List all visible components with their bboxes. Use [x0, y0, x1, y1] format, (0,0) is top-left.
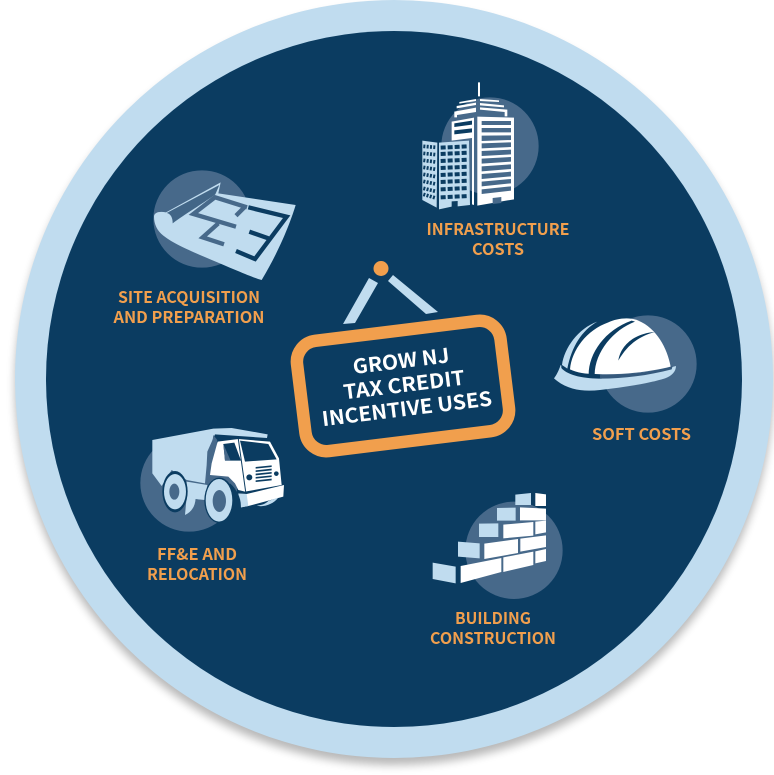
label: ff&e and relocation — [147, 541, 247, 585]
label: soft costs: SOFT COSTS — [592, 421, 691, 445]
cab — [210, 439, 282, 492]
sign: grow nj — [295, 261, 511, 454]
rear wheel — [162, 471, 188, 512]
label: site acquisition and preparation: SITE ACQUISITION — [118, 284, 260, 308]
label: building construction: BUILDING — [455, 605, 531, 629]
sign text: TAX CREDIT — [342, 362, 466, 405]
sign text: GROW NJ — [351, 339, 451, 380]
sign text — [314, 335, 493, 432]
icon: blueprint — [153, 170, 296, 280]
sign straps — [343, 275, 438, 324]
icon: brick wall — [433, 493, 563, 599]
axle — [187, 482, 207, 500]
label: building construction: CONSTRUCTION — [430, 625, 556, 649]
left tower — [422, 141, 470, 209]
label: infrastructure costs — [426, 216, 570, 260]
cargo bed — [152, 428, 268, 486]
sign text: INCENTIVE USES — [320, 383, 493, 432]
cab shadow — [207, 435, 217, 485]
sign board — [295, 318, 511, 454]
label: ff&e and relocation: RELOCATION — [147, 561, 247, 585]
label: site acquisition and preparation — [112, 284, 264, 328]
label: building construction — [430, 605, 556, 649]
sign hook — [374, 261, 388, 276]
label: ff&e and relocation: FF&E AND — [157, 541, 237, 565]
bumper — [238, 485, 284, 507]
icon: office buildings — [422, 82, 539, 209]
label: site acquisition and preparation: AND PREPARATION — [112, 304, 264, 328]
label: infrastructure costs: INFRASTRUCTURE — [426, 216, 570, 240]
icon: hard hat — [554, 315, 697, 413]
label: infrastructure costs: COSTS — [472, 236, 524, 260]
icon: dump truck — [140, 428, 284, 532]
front wheel — [218, 483, 241, 522]
